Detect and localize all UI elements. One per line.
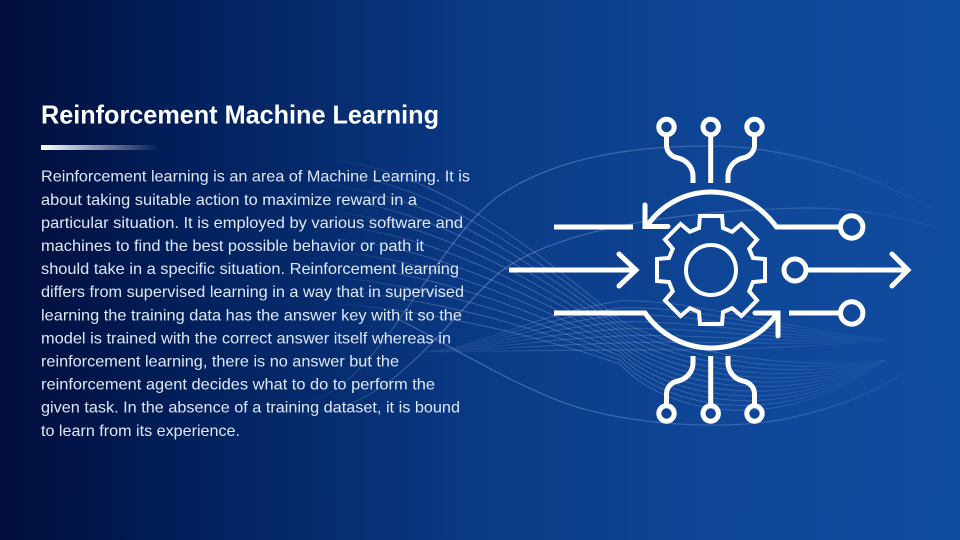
- body text: machines to find the best possible behavior or path it: [41, 238, 425, 255]
- icon: right output node: [789, 302, 863, 324]
- icon: bottom cycle arrow: [554, 313, 778, 348]
- body text: should take in a specific situation. Reinforcement learning: [41, 261, 459, 278]
- icon: left input line: [554, 224, 633, 230]
- body text: given task. In the absence of a training dataset, it is bound: [41, 400, 460, 417]
- body text: about taking suitable action to maximize reward in a: [41, 192, 417, 209]
- body text: learning the training data has the answer key with it so the: [41, 307, 462, 324]
- body text: [41, 169, 470, 440]
- title: Reinforcement Machine Learning: [41, 99, 439, 129]
- arrow: input: [509, 254, 636, 286]
- decorative wave lines: [300, 146, 960, 425]
- icon: bottom circuit traces: [659, 356, 762, 421]
- body text: model is trained with the correct answer itself whereas in: [41, 330, 451, 347]
- icon: top circuit traces: [659, 119, 762, 183]
- title underline: [41, 145, 159, 150]
- body text: reinforcement learning, there is no answer but the: [41, 354, 399, 370]
- body text: Reinforcement learning is an area of Machine Learning. It is: [41, 169, 470, 186]
- body text: to learn from its experience.: [41, 423, 240, 440]
- body text: particular situation. It is employed by various software and: [41, 215, 463, 232]
- body text: differs from supervised learning in a way that in supervised: [41, 284, 464, 301]
- body text: reinforcement agent decides what to do to perform the: [41, 377, 435, 394]
- arrow: output: [784, 254, 908, 286]
- icon: gear: [657, 216, 765, 324]
- icon: top cycle arrow: [645, 192, 863, 238]
- icon: machine learning gear circuit: [509, 119, 908, 421]
